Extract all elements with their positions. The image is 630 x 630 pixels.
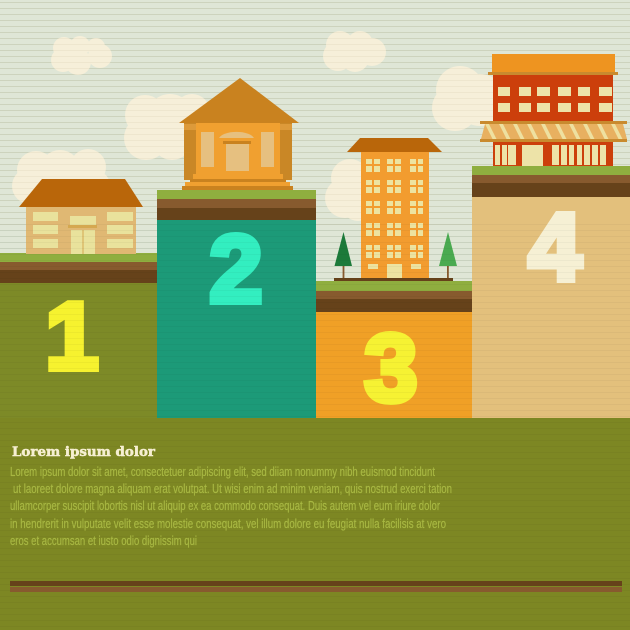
body text: ut laoreet dolore magna aliquam erat volutpat. Ut wisi enim ad minim veniam, quis nostrud exerci tation [13, 481, 452, 496]
icon: left tree [334, 232, 352, 279]
cloud: behind tower [325, 159, 374, 221]
platform 1 [0, 253, 158, 419]
body text: in hendrerit in vulputate velit esse molestie consequat, vel illum dolore eu feugiat nulla facilisis at vero [10, 516, 446, 531]
heading: Lorem ipsum dolor [12, 445, 155, 460]
number 3: 3 [364, 315, 418, 422]
icon: house [19, 179, 143, 254]
clouds [12, 31, 506, 221]
cloud: top left [51, 36, 112, 75]
body text: eros et accumsan et iusto odio dignissim qui [10, 533, 197, 548]
footer bars [10, 581, 622, 592]
icon: apartment tower [334, 138, 453, 281]
icon: shop building [480, 54, 627, 166]
cloud: behind house [12, 149, 110, 207]
cloud: behind bank [124, 94, 210, 160]
platform 4 [472, 166, 630, 418]
icon: bank [179, 78, 299, 190]
platform 2 [157, 190, 316, 418]
stripe overlay [0, 220, 630, 630]
body text [10, 464, 452, 548]
cloud: top centre [323, 31, 386, 72]
cloud stripes [0, 0, 630, 230]
number 1: 1 [45, 283, 99, 390]
sky background [0, 0, 630, 420]
body text: Lorem ipsum dolor sit amet, consectetuer adipiscing elit, sed diiam nonummy nibh euismod tincidunt [10, 464, 435, 479]
icon: right tree [439, 232, 457, 279]
number 2: 2 [209, 216, 263, 323]
number 4: 4 [528, 194, 582, 301]
body text: ullamcorper suscipit lobortis nisl ut aliquip ex ea commodo consequat. Duis autem vel eum iriure dolor [10, 498, 440, 513]
platform 3 [316, 281, 472, 418]
cloud: behind shop [432, 66, 506, 131]
ground panel [0, 418, 630, 630]
